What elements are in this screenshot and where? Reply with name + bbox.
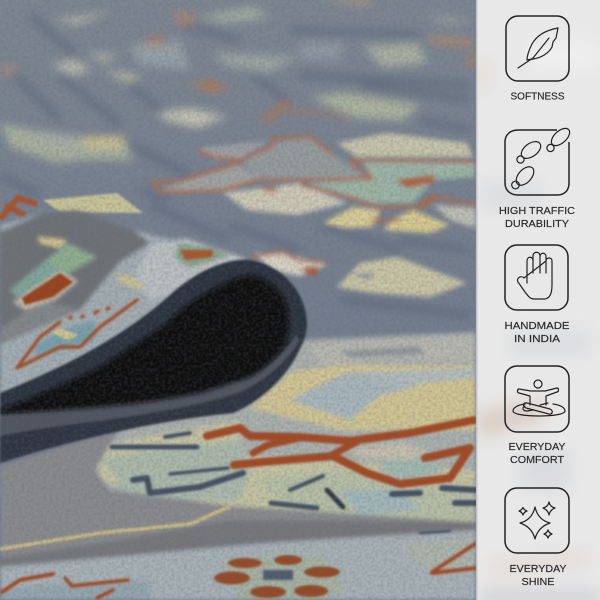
label: softness: SOFTNESS: [510, 90, 564, 102]
feature: handmade in india: [504, 245, 570, 345]
panel: features sidebar: [476, 0, 600, 600]
lower band: [0, 530, 476, 600]
foreground rug motifs: [0, 420, 476, 598]
lower dark rim: [122, 342, 302, 418]
icon: sparkles: [505, 488, 569, 553]
rug background field: [0, 0, 477, 600]
mid rug pattern: [152, 133, 476, 297]
label: everyday comfort: EVERYDAY: [508, 441, 566, 453]
lower grey selvedge: [0, 335, 302, 436]
label: everyday comfort: [508, 441, 566, 466]
label: handmade in india: HANDMADE: [504, 320, 570, 332]
label: everyday comfort: COMFORT: [510, 454, 565, 466]
feature: high traffic durability: [499, 125, 575, 230]
feature: everyday comfort: [505, 366, 569, 466]
rolled rug corner: [0, 193, 307, 463]
blurred far rug pattern: [0, 0, 476, 315]
icon: footprints: [505, 125, 573, 195]
fiber noise texture: [0, 0, 477, 600]
photo: rolled rug: [0, 0, 477, 600]
label: high traffic durability: DURABILITY: [505, 218, 569, 230]
icon: hand: [505, 245, 568, 310]
black inner: [0, 275, 289, 412]
label: high traffic durability: [499, 205, 575, 230]
rolled top surface: [0, 210, 260, 420]
foreground rug border: [0, 332, 476, 600]
label: high traffic durability: HIGH TRAFFIC: [499, 205, 575, 217]
underside of roll: [0, 258, 308, 430]
grey field: [0, 432, 459, 559]
feature: softness: [506, 16, 569, 102]
label: everyday shine: SHINE: [522, 576, 554, 588]
label: everyday shine: [510, 563, 566, 588]
icon: feather: [506, 16, 569, 81]
label: handmade in india: IN INDIA: [514, 333, 560, 345]
icon: meditation: [505, 366, 569, 432]
far left motif: [0, 193, 143, 219]
label: everyday shine: EVERYDAY: [510, 563, 566, 575]
label: handmade in india: [504, 320, 570, 345]
feature: everyday shine: [505, 488, 569, 588]
